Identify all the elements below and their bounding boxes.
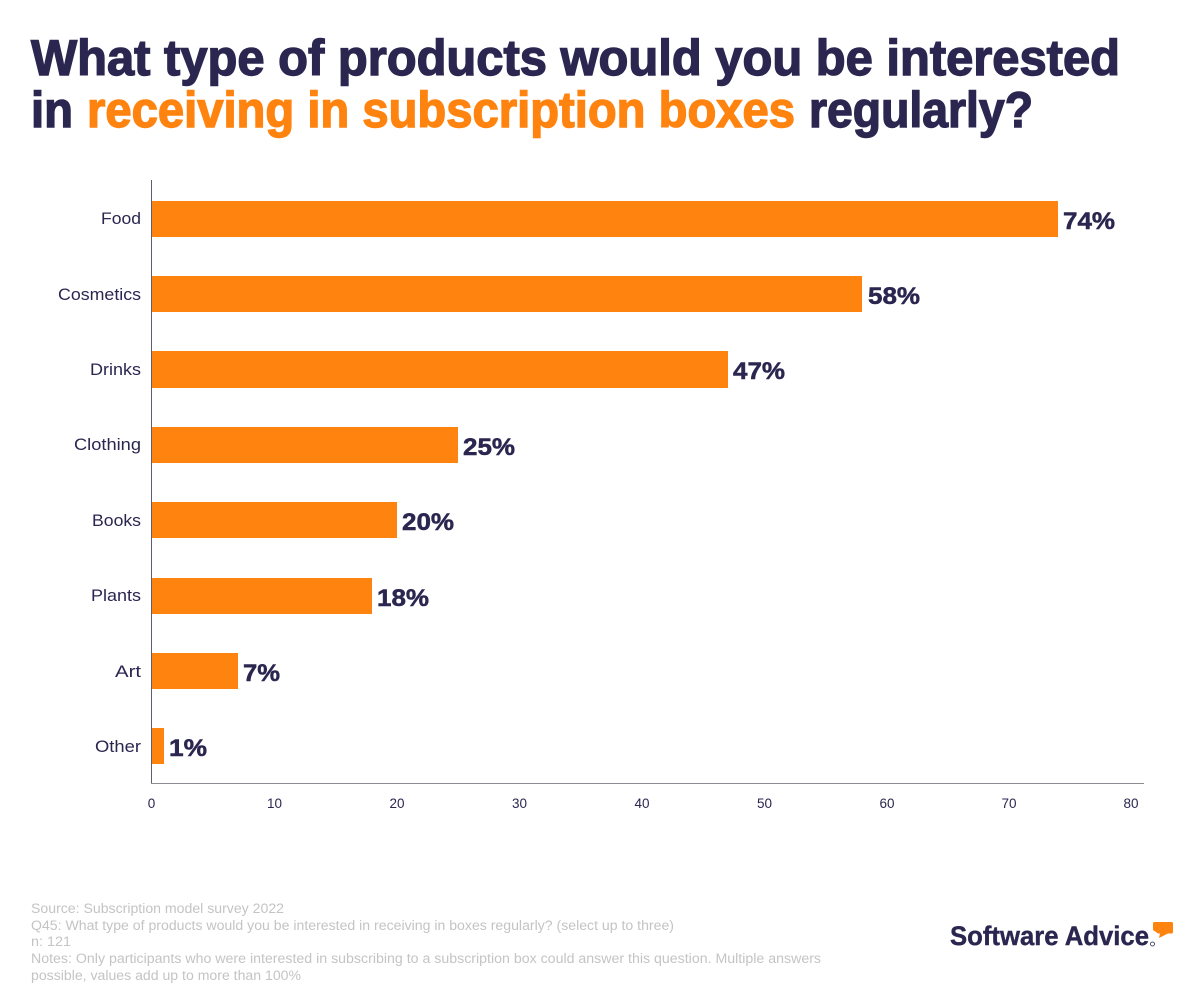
value labels: 18%: [377, 585, 429, 612]
value labels: [169, 208, 1115, 762]
bar chart: [58, 180, 1144, 811]
value labels: 1%: [169, 735, 207, 762]
category labels: Plants: [91, 586, 141, 605]
source notes: possible, values add up to more than 100%: [31, 968, 301, 983]
title: receiving in subscription boxes: [87, 82, 795, 138]
value labels: 7%: [243, 660, 280, 687]
icon: speech bubble: [1153, 922, 1173, 938]
source notes: Source: Subscription model survey 2022: [31, 901, 284, 916]
category labels: Drinks: [90, 360, 141, 379]
source notes: Notes: Only participants who were interested in subscribing to a subscription box could answer this question. Multiple answers: [31, 951, 821, 966]
x axis tick labels: 60: [879, 796, 895, 811]
category labels: Other: [95, 737, 141, 756]
category labels: Food: [101, 209, 141, 228]
value labels: 20%: [402, 509, 454, 536]
x axis tick labels: 10: [267, 796, 282, 811]
x axis tick labels: 70: [1001, 796, 1017, 811]
category labels: [58, 209, 141, 756]
title: regularly?: [809, 82, 1033, 138]
source notes: Q45: What type of products would you be interested in receiving in boxes regularly? (select up to three): [31, 918, 674, 933]
category labels: Art: [115, 662, 141, 681]
x axis tick labels: 80: [1123, 796, 1139, 811]
x axis tick labels: 40: [634, 796, 650, 811]
x axis tick labels: 50: [757, 796, 772, 811]
category labels: Books: [92, 511, 141, 530]
x axis tick labels: 0: [148, 796, 155, 811]
value labels: 58%: [868, 283, 920, 310]
title: in: [31, 82, 73, 138]
title: What type of products would you be interested: [31, 30, 1120, 86]
source notes: [31, 901, 821, 983]
logo: Software Advice: Software Advice: [950, 921, 1149, 951]
x axis tick labels: 20: [389, 796, 405, 811]
value labels: 74%: [1063, 208, 1115, 235]
category labels: Clothing: [74, 435, 141, 454]
bars: [152, 201, 1058, 764]
value labels: 47%: [733, 358, 785, 385]
category labels: Cosmetics: [58, 285, 141, 304]
title: [31, 30, 1120, 138]
x axis tick labels: [148, 796, 1139, 811]
x axis tick labels: 30: [512, 796, 527, 811]
source notes: n: 121: [31, 934, 71, 949]
value labels: 25%: [463, 434, 515, 461]
axes: [151, 180, 1144, 784]
